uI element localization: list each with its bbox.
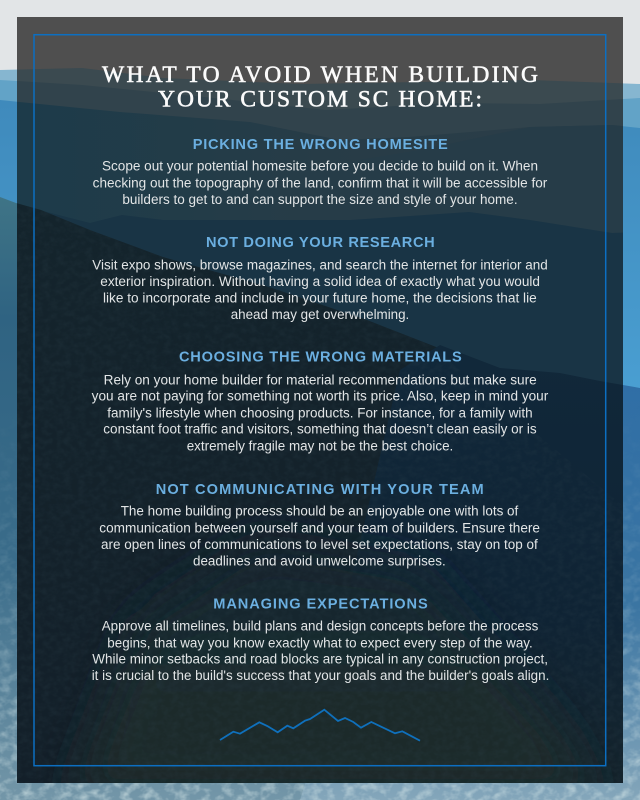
section: choosing the wrong materials [92, 350, 549, 453]
body text: Visit expo shows, browse magazines, and search the internet for interior and [92, 257, 548, 272]
body text [92, 257, 548, 322]
body text: constant foot traffic and visitors, something that doesn’t clean easily or is [103, 422, 537, 437]
heading: PICKING THE WRONG HOMESITE [193, 137, 448, 153]
body text: family's lifestyle when choosing products. For instance, for a family with [107, 405, 533, 420]
body text: exterior inspiration. Without having a solid idea of exactly what you would [100, 274, 540, 289]
body text [99, 504, 540, 568]
title [102, 62, 538, 113]
body text: builders to get to and can support the size and style of your home. [122, 192, 518, 207]
body text: deadlines and avoid unwelcome surprises. [193, 553, 446, 568]
body text: Rely on your home builder for material recommendations but make sure [104, 372, 537, 387]
icon: mountain ridge line [220, 710, 420, 741]
section: managing expectations [92, 596, 549, 683]
body text [93, 159, 548, 207]
body text: it is crucial to the build's success that your goals and the builder's goals align. [92, 668, 549, 683]
body text: begins, that way you know exactly what to expect every step of the way. [107, 635, 533, 650]
section: picking the wrong homesite [93, 137, 548, 207]
body text: checking out the topography of the land, confirm that it will be accessible for [93, 175, 548, 190]
body text: Scope out your potential homesite before you decide to build on it. When [102, 159, 538, 174]
body text: extremely fragile may not be the best choice. [187, 438, 453, 453]
body text: Approve all timelines, build plans and design concepts before the process [102, 619, 539, 634]
title: YOUR CUSTOM SC HOME: [158, 87, 482, 113]
heading: NOT COMMUNICATING WITH YOUR TEAM [156, 482, 484, 498]
heading: CHOOSING THE WRONG MATERIALS [179, 350, 462, 366]
body text: like to incorporate and include in your future home, the decisions that lie [103, 291, 537, 306]
heading: NOT DOING YOUR RESEARCH [206, 235, 435, 251]
body text: are open lines of communications to level set expectations, stay on top of [101, 537, 538, 552]
body text [92, 372, 549, 453]
body text: communication between yourself and your team of builders. Ensure there [99, 520, 540, 535]
section: not doing your research [92, 235, 548, 322]
body text: While minor setbacks and road blocks are typical in any construction project, [92, 652, 548, 667]
body text: The home building process should be an enjoyable one with lots of [121, 504, 519, 519]
title: WHAT TO AVOID WHEN BUILDING [102, 62, 538, 88]
body text: ahead may get overwhelming. [231, 307, 409, 322]
body text: you are not paying for something not worth its price. Also, keep in mind your [92, 389, 549, 404]
body text [92, 619, 549, 683]
heading: MANAGING EXPECTATIONS [213, 596, 428, 612]
section: not communicating with your team [99, 482, 540, 568]
